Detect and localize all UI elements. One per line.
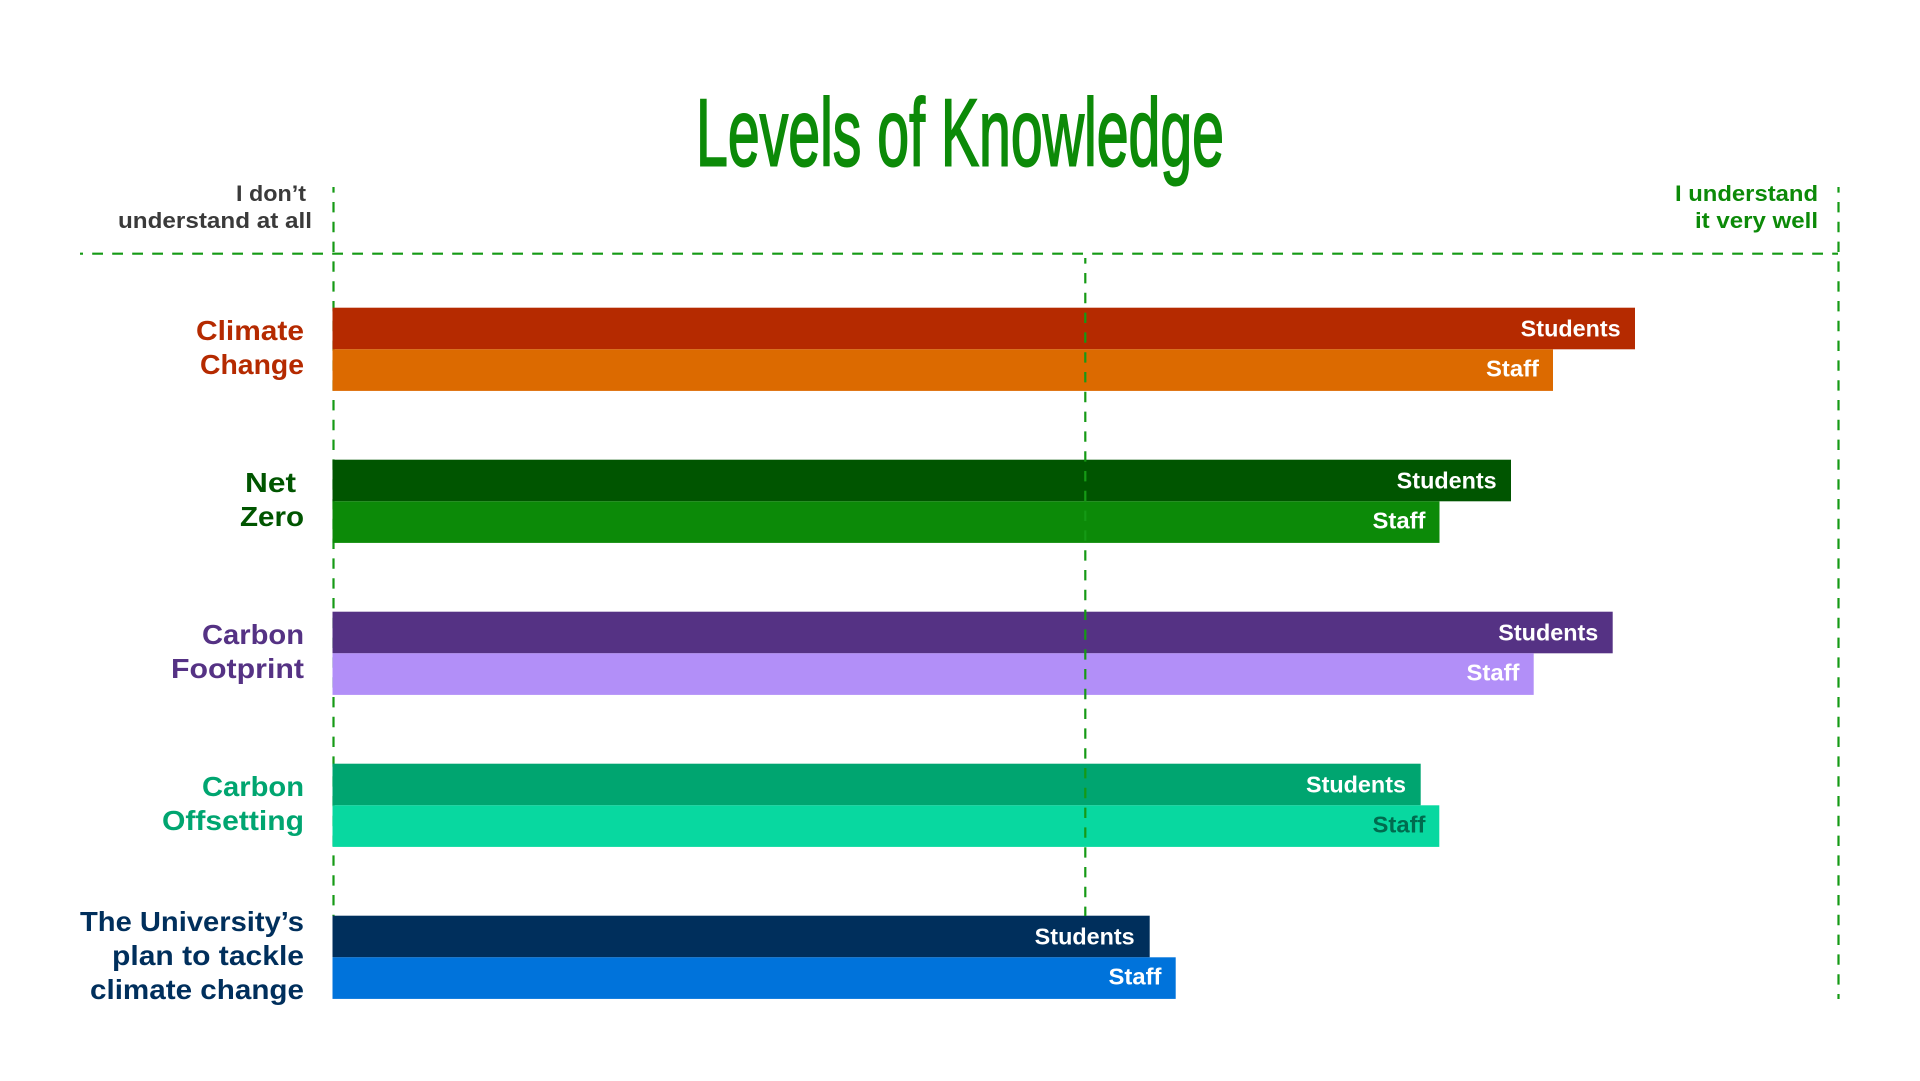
bar: Carbon Footprint students (332, 612, 1613, 653)
bar label: Students: Students (1397, 468, 1497, 494)
group: Carbon Offsetting (162, 764, 1439, 847)
axis line: right maximum (1837, 187, 1840, 999)
axis label: high end: I understand (1675, 181, 1818, 206)
label: The University's plan to tackle climate change: The University’s (80, 906, 304, 937)
label: Net Zero (240, 467, 304, 532)
axis label: high end: it very well (1695, 208, 1818, 233)
bar label: Students: Students (1498, 620, 1598, 646)
label: Net Zero: Net (245, 467, 296, 498)
label: The University's plan to tackle climate change (80, 906, 304, 1005)
bar label: Staff: Staff (1486, 356, 1539, 382)
axis label: low end: understand at all (118, 208, 312, 233)
group: University plan (80, 906, 1176, 1005)
bar: Carbon Footprint staff (332, 653, 1534, 695)
bar: Climate Change students (332, 308, 1635, 349)
title: Levels of Knowledge (696, 80, 1224, 186)
group: Carbon Footprint (171, 612, 1613, 695)
axis label: low end (118, 181, 312, 233)
bar: Carbon Offsetting students (332, 764, 1421, 805)
bar: Net Zero students (332, 460, 1511, 501)
bar: Climate Change staff (332, 349, 1553, 391)
bar: Net Zero staff (332, 501, 1440, 543)
label: Net Zero: Zero (240, 501, 304, 532)
label: The University's plan to tackle climate change: plan to tackle (112, 940, 304, 971)
label: The University's plan to tackle climate change: climate change (90, 974, 304, 1005)
group: Climate Change (196, 308, 1635, 391)
bar label: Students: Students (1306, 772, 1406, 798)
bar label: Staff: Staff (1108, 964, 1162, 990)
label: Carbon Footprint: Footprint (171, 653, 304, 684)
bar label: Staff: Staff (1372, 812, 1426, 838)
label: Carbon Offsetting: Carbon (202, 771, 304, 802)
bar label: Students: Students (1521, 316, 1621, 342)
axis line: horizontal scale line (80, 253, 1838, 255)
label: Carbon Offsetting: Offsetting (162, 805, 304, 836)
bar label: Students: Students (1035, 924, 1135, 950)
bar: Carbon Offsetting staff (332, 805, 1439, 847)
bar: University plan students (332, 916, 1150, 957)
axis line: midpoint (1084, 258, 1086, 916)
label: Carbon Offsetting (162, 771, 304, 836)
label: Climate Change: Climate (196, 315, 304, 346)
label: Carbon Footprint: Carbon (202, 619, 304, 650)
axis line: left minimum (332, 187, 335, 916)
label: Carbon Footprint (171, 619, 304, 684)
axis label: low end: I don’t (236, 181, 307, 206)
bar label: Staff: Staff (1466, 660, 1520, 686)
group: Net Zero (240, 460, 1511, 543)
bar label: Staff: Staff (1372, 508, 1426, 534)
label: Climate Change (196, 315, 304, 380)
bar: University plan staff (332, 957, 1176, 999)
label: Climate Change: Change (200, 349, 304, 380)
axis label: high end (1675, 181, 1818, 233)
